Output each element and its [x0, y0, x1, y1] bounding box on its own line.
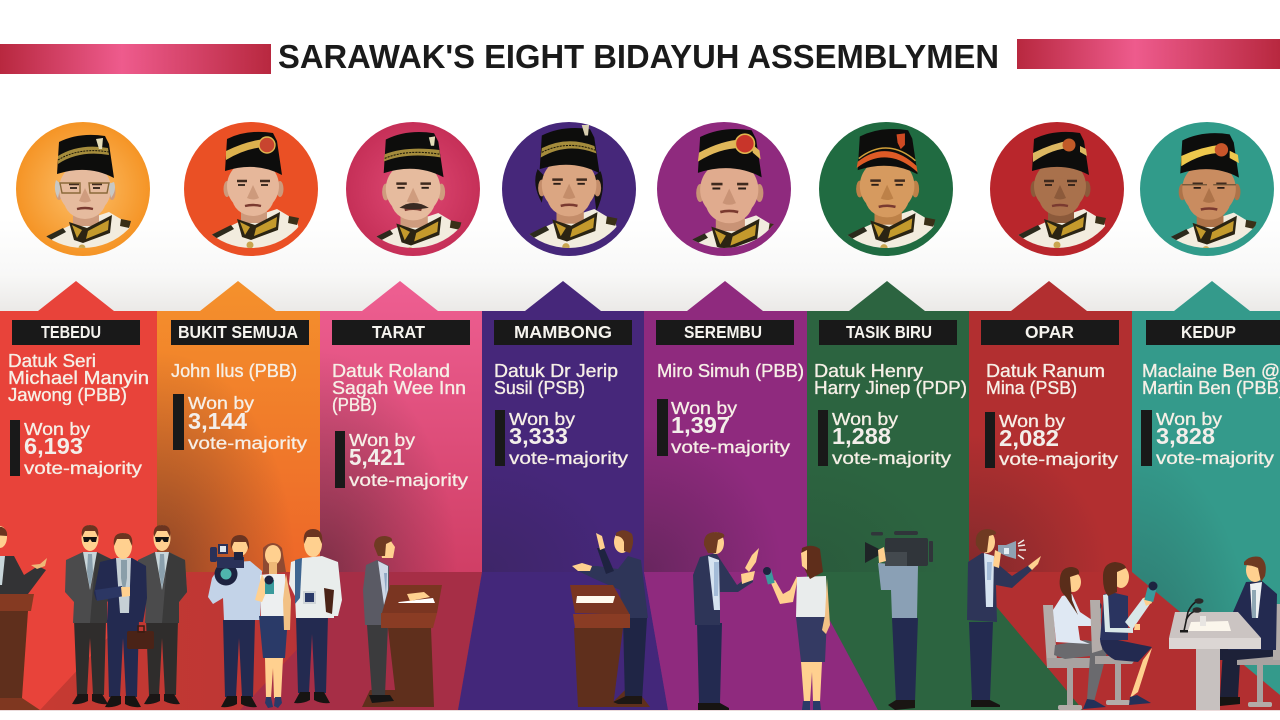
illustration: female reporter — [255, 543, 291, 708]
majority result: vote-majority — [188, 433, 307, 453]
panel: Tarat — [320, 281, 482, 710]
assemblyman name: Miro Simuh (PBB) — [657, 361, 804, 381]
left title bar — [0, 44, 271, 74]
constituency label: TASIK BIRU — [846, 322, 932, 342]
majority result: vote-majority — [24, 458, 142, 478]
majority result: Won by — [349, 430, 415, 450]
majority result: 6,193 — [24, 433, 83, 459]
portrait: Tasik Biru — [819, 122, 953, 260]
majority result: Won by — [999, 411, 1065, 431]
majority result — [1141, 409, 1274, 468]
constituency label: TEBEDU — [41, 322, 101, 342]
bottom edge line — [0, 710, 1280, 711]
constituency label: OPAR — [1025, 322, 1074, 342]
majority result: 1,288 — [832, 423, 891, 449]
majority result: Won by — [188, 393, 254, 413]
assemblyman name — [1142, 361, 1280, 398]
assemblyman name: Jawong (PBB) — [8, 385, 127, 405]
majority result: Won by — [1156, 409, 1222, 429]
floor perspective shapes — [40, 572, 1280, 710]
portrait: Mambong — [502, 122, 636, 259]
assemblyman name: Susil (PSB) — [494, 378, 585, 398]
constituency label — [12, 320, 140, 345]
assemblyman name: John Ilus (PBB) — [171, 361, 297, 381]
majority result: 2,082 — [999, 425, 1059, 451]
majority result: 3,828 — [1156, 423, 1215, 449]
portrait: Tarat — [346, 122, 480, 263]
assemblyman name: Mina (PSB) — [986, 378, 1077, 398]
illustration: man with briefcase — [94, 533, 154, 707]
panel: Tasik Biru — [807, 281, 969, 710]
portrait: Serembu — [657, 122, 791, 269]
assemblyman name: Martin Ben (PBB) — [1142, 378, 1280, 398]
constituency label — [656, 320, 794, 345]
right title bar — [1017, 39, 1280, 69]
majority result: 3,144 — [188, 408, 247, 434]
constituency label: MAMBONG — [514, 322, 612, 342]
majority result: Won by — [24, 419, 90, 439]
assemblyman name: Datuk Dr Jerip — [494, 361, 618, 381]
majority result — [818, 409, 951, 468]
illustration: man with megaphone — [967, 529, 1041, 707]
constituency label — [819, 320, 957, 345]
majority result: vote-majority — [671, 437, 790, 457]
panel: Mambong — [482, 281, 644, 710]
constituency label — [332, 320, 470, 345]
assemblyman name: Harry Jinep (PDP) — [814, 378, 967, 398]
portrait: Bukit Semuja — [184, 122, 318, 257]
portrait: Opar — [990, 122, 1124, 257]
assemblyman name — [986, 361, 1105, 398]
title: SARAWAK'S EIGHT BIDAYUH ASSEMBLYMEN — [278, 38, 999, 75]
illustration: bodyguard left — [65, 525, 115, 704]
panel: Opar — [969, 281, 1132, 710]
assemblyman name: (PBB) — [332, 395, 377, 415]
majority result — [985, 411, 1118, 469]
assemblyman name — [8, 351, 149, 405]
illustration: TV cameraman — [865, 531, 933, 710]
majority result: 3,333 — [509, 423, 568, 449]
illustration: seated reporter left — [1043, 567, 1107, 710]
panel: Bukit Semuja — [157, 281, 320, 710]
constituency label: BUKIT SEMUJA — [178, 322, 298, 342]
illustration: man being interviewed — [693, 532, 759, 710]
majority result: vote-majority — [349, 470, 468, 490]
majority result: Won by — [671, 398, 737, 418]
majority result: vote-majority — [509, 448, 628, 468]
assemblyman name: Datuk Seri — [8, 351, 96, 371]
illustration: cameraman — [208, 535, 262, 707]
constituency label: SEREMBU — [684, 322, 762, 342]
portrait: Tebedu — [16, 122, 150, 260]
majority result — [10, 419, 142, 478]
constituency label — [981, 320, 1119, 345]
illustration: bodyguard right — [137, 525, 187, 704]
assemblyman name: Datuk Roland — [332, 361, 450, 381]
assemblyman name — [814, 361, 967, 398]
illustration: seated reporter right — [1090, 562, 1158, 705]
majority result: vote-majority — [832, 448, 951, 468]
illustration: speaker at lectern, Tarat — [362, 536, 442, 707]
majority result: vote-majority — [999, 449, 1118, 469]
assemblyman name — [332, 361, 466, 415]
assemblyman name: Datuk Ranum — [986, 361, 1105, 381]
majority result — [495, 409, 628, 468]
constituency label — [1146, 320, 1280, 345]
majority result: 5,421 — [349, 444, 405, 470]
assemblyman name: Maclaine Ben @ — [1142, 361, 1280, 381]
majority result: 1,397 — [671, 412, 730, 438]
portrait: Kedup — [1140, 122, 1274, 262]
illustration: speaker at podium, Tebedu — [0, 526, 47, 710]
majority result: Won by — [509, 409, 575, 429]
illustration: interviewer with microphone — [763, 546, 830, 710]
panel: Kedup — [1132, 281, 1280, 710]
panel: Serembu — [644, 281, 807, 710]
illustration: man at press table — [1169, 557, 1280, 710]
majority result — [335, 430, 468, 490]
illustration: man with press bag — [289, 529, 342, 703]
majority result — [657, 398, 790, 457]
assemblyman name: Sagah Wee Inn — [332, 378, 466, 398]
panel: Tebedu — [0, 281, 157, 710]
constituency label — [494, 320, 632, 345]
constituency label: KEDUP — [1181, 322, 1236, 342]
assemblyman name: Michael Manyin — [8, 368, 149, 388]
top background fade — [0, 0, 1280, 312]
illustration: speaker at lectern, Mambong — [570, 530, 650, 707]
constituency label: TARAT — [372, 322, 425, 342]
assemblyman name: Datuk Henry — [814, 361, 923, 381]
majority result — [173, 393, 307, 453]
assemblyman name — [494, 361, 618, 398]
majority result: vote-majority — [1156, 448, 1274, 468]
majority result: Won by — [832, 409, 898, 429]
